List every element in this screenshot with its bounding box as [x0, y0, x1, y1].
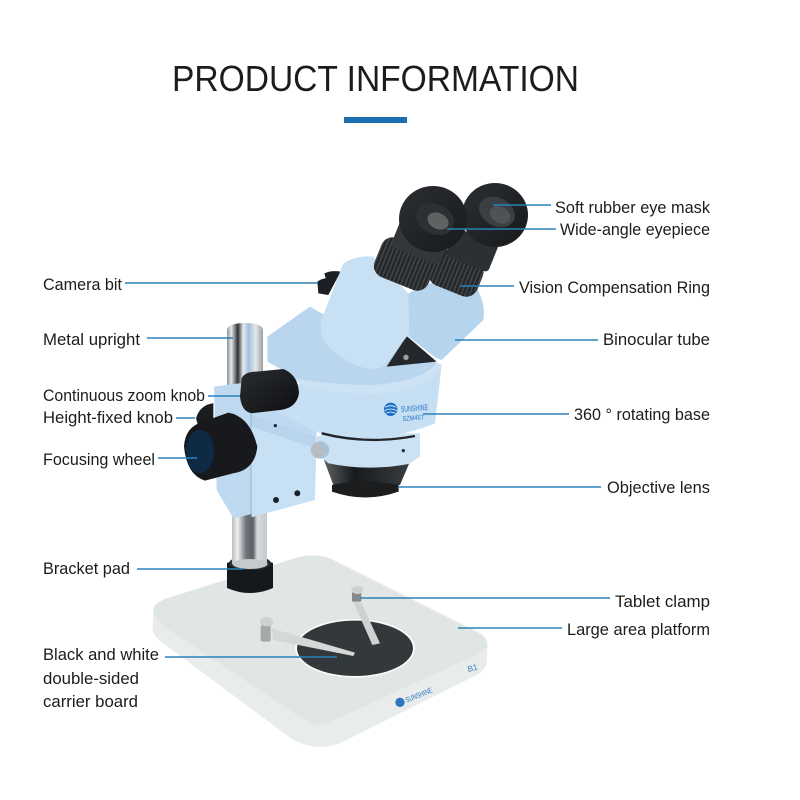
left eyepiece [370, 186, 467, 294]
SUNSHINE logo: SZM45T [402, 414, 425, 423]
carrier board [297, 621, 413, 676]
continuous zoom knob [240, 369, 299, 413]
label: Objective lens: Objective lens [607, 479, 710, 497]
right eyepiece [425, 183, 528, 300]
label: Continuous zoom knob: Continuous zoom knob [43, 387, 205, 405]
label: Black and white double-sided carrier board: carrier board [43, 693, 138, 711]
label: Wide-angle eyepiece: Wide-angle eyepiece [560, 221, 710, 239]
binocular tube right [407, 282, 484, 360]
angled neck [267, 307, 442, 394]
label: Vision Compensation Ring: Vision Compensation Ring [519, 279, 710, 297]
bracket pad [227, 556, 273, 593]
label: Bracket pad: Bracket pad [43, 560, 130, 578]
label: Camera bit: Camera bit [43, 276, 122, 294]
label: Large area platform: Large area platform [567, 621, 710, 639]
label: 360 rotating base: 360 ° rotating base [574, 406, 710, 424]
label: Black and white double-sided carrier board: Black and white [43, 646, 159, 664]
SUNSHINE logo [384, 402, 429, 423]
title: PRODUCT INFORMATION [172, 58, 579, 99]
microscope illustration [153, 183, 528, 747]
objective lens [324, 460, 411, 497]
label: Soft rubber eye mask: Soft rubber eye mask [555, 199, 711, 217]
focusing wheel [184, 413, 257, 481]
label: Black and white double-sided carrier board [43, 646, 337, 711]
SUNSHINE logo: SUNSHINE [400, 402, 429, 414]
prism [387, 336, 437, 367]
height-fixed knob [196, 403, 213, 433]
lower ring [317, 433, 420, 468]
label: Tablet clamp: Tablet clamp [615, 593, 710, 611]
focus bracket [214, 383, 317, 518]
base logo: B1 [466, 662, 479, 674]
base logo [395, 662, 479, 707]
label: Black and white double-sided carrier board: double-sided [43, 670, 139, 688]
camera bit [317, 271, 341, 295]
upright pillar [227, 323, 268, 569]
zoom housing [273, 365, 442, 438]
label: Focusing wheel: Focusing wheel [43, 451, 155, 469]
tablet clamps [260, 586, 380, 656]
base logo: SUNSHINE [404, 686, 434, 705]
label: Height-fixed knob: Height-fixed knob [43, 409, 173, 427]
label: Binocular tube: Binocular tube [603, 331, 710, 349]
platform base [153, 555, 487, 747]
label: Metal upright: Metal upright [43, 331, 140, 349]
binocular tube left [321, 256, 409, 369]
bolt [311, 441, 329, 459]
title underline [344, 117, 407, 123]
